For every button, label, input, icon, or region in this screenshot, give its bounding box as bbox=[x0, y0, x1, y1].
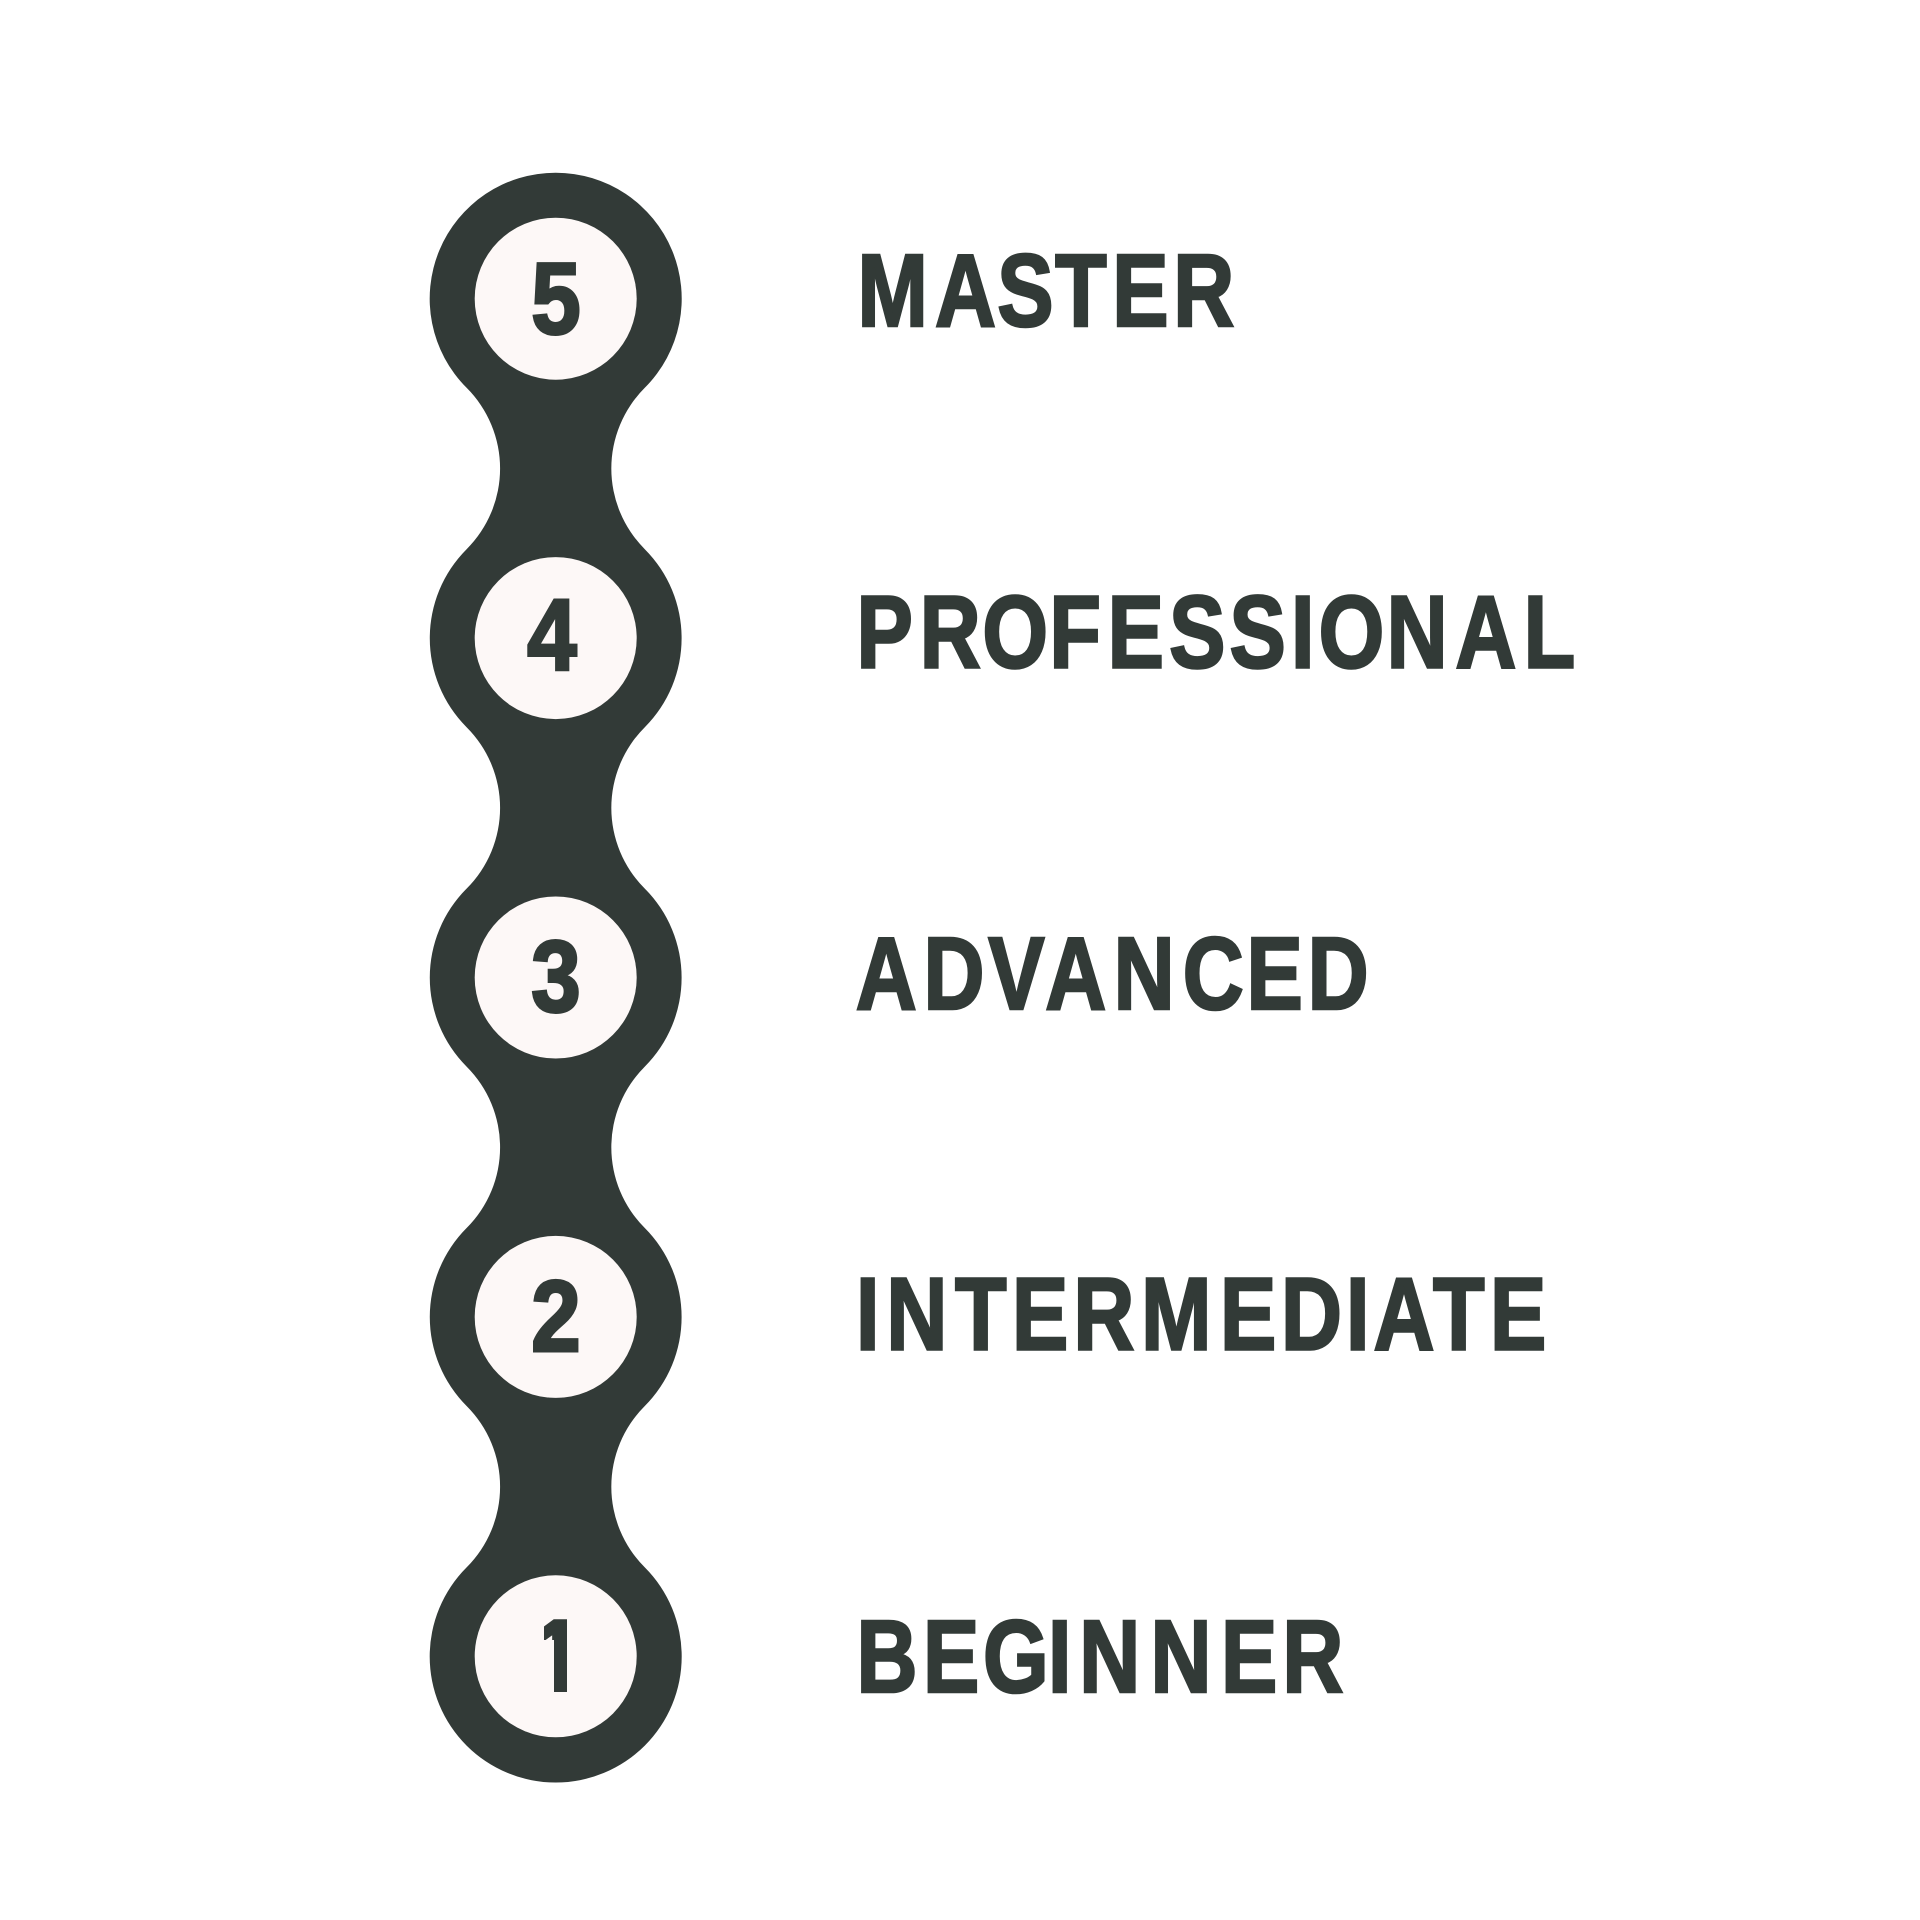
chain shape: connected level track bbox=[430, 173, 682, 1782]
label: master: MASTER bbox=[857, 233, 1234, 348]
level 1 badge bbox=[475, 1575, 637, 1737]
level 2 badge: 2 bbox=[531, 1261, 581, 1373]
level 1 badge: 1 bbox=[533, 1600, 582, 1713]
level 3 badge: 3 bbox=[531, 921, 581, 1034]
level 5 badge bbox=[475, 218, 637, 380]
label: professional: PROFESSIONAL bbox=[857, 574, 1575, 689]
level 4 badge: 4 bbox=[527, 579, 577, 692]
level 2 badge bbox=[475, 1236, 637, 1398]
label: advanced: ADVANCED bbox=[856, 916, 1369, 1031]
label: beginner: BEGINNER bbox=[857, 1599, 1343, 1714]
level 5 badge: 5 bbox=[531, 243, 581, 356]
level 4 badge bbox=[475, 557, 637, 719]
label: intermediate: INTERMEDIATE bbox=[856, 1257, 1546, 1372]
level 3 badge bbox=[475, 896, 637, 1058]
